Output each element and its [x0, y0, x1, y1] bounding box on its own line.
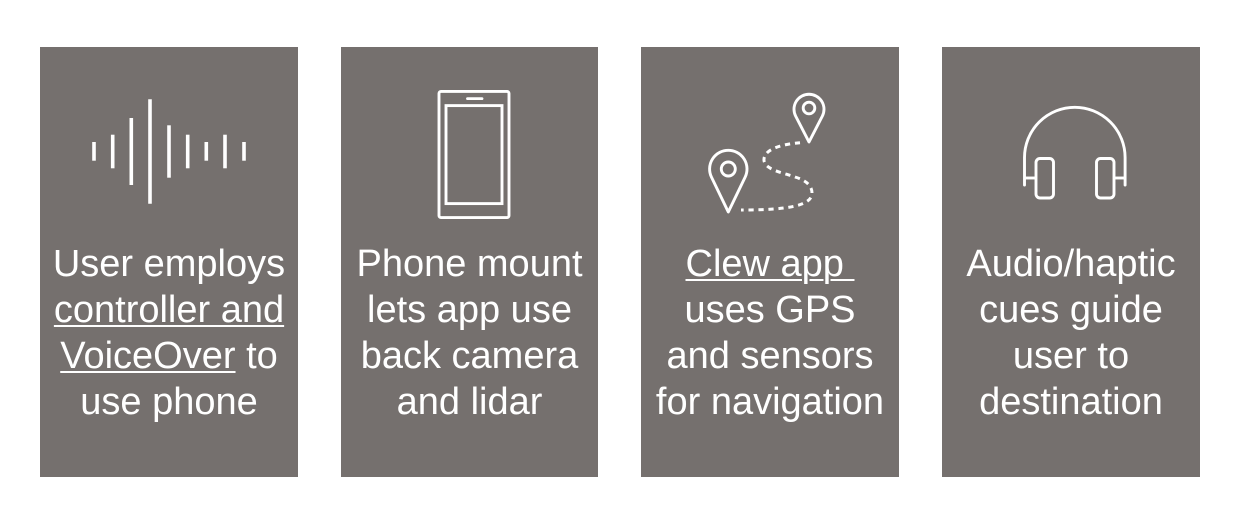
icon: sound wave	[92, 99, 246, 204]
text: step 4: Audio/haptic cues guide user to destination	[966, 243, 1176, 423]
icon: phone	[438, 90, 510, 219]
panel: controller and VoiceOver	[40, 47, 298, 477]
text: step 3: Clew app uses GPS and sensors for navigation	[656, 243, 884, 423]
text: step 2: Phone mount lets app use back camera and lidar	[356, 243, 583, 423]
icon: map route with pins	[708, 92, 826, 214]
panel: Clew app	[641, 47, 899, 477]
panel: phone mount	[341, 47, 598, 477]
text: step 1: User employs controller and VoiceOver to use phone	[53, 243, 285, 423]
icon: headphones	[1023, 106, 1127, 200]
panel: audio and haptic cues	[942, 47, 1200, 477]
